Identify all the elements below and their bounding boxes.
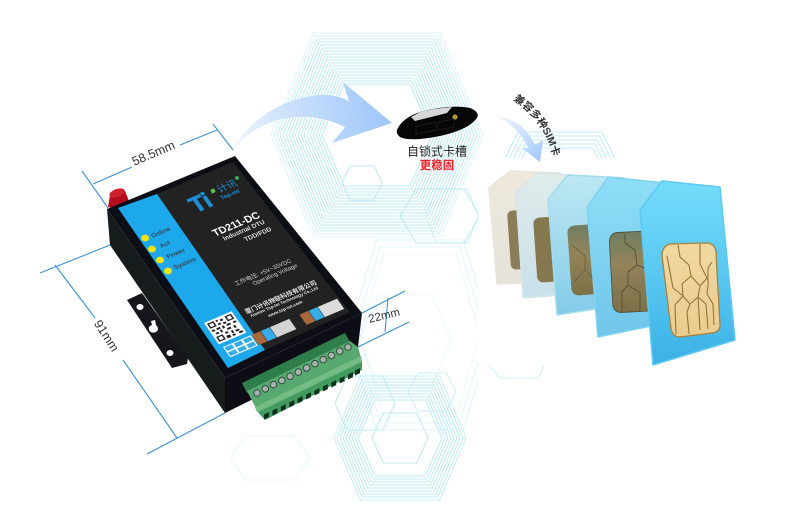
- SIM card 3: [548, 175, 640, 315]
- arrow: slot to SIM cards: [497, 117, 543, 162]
- logo: Ti: [184, 188, 217, 217]
- logo: 计讯: [214, 177, 240, 195]
- arrow: device to card slot: [229, 82, 392, 154]
- device: TD211-DC DTU: [107, 156, 362, 420]
- QR code: [204, 311, 246, 344]
- dimension: 91mm height: [40, 245, 225, 454]
- company text: 厦门计讯物联科技有限公司: [243, 278, 318, 316]
- white backdrop behind SIM cards: [478, 158, 800, 529]
- operating voltage text: Operating Voltage: [252, 263, 300, 287]
- dimension: 58.5mm width: [82, 124, 233, 208]
- SIM card 4: [587, 177, 680, 337]
- enclosure front side: [225, 313, 362, 413]
- LED labels: Act: [158, 240, 173, 250]
- company text: Xiamen Top-Iot Technology Co.,Ltd: [249, 285, 319, 318]
- caption: more secure: 更稳固: [420, 158, 454, 172]
- model text: Industrial DTU: [222, 219, 267, 242]
- LED labels: Power: [165, 247, 188, 260]
- gold chip: [662, 243, 720, 337]
- SIM card 1: [489, 171, 570, 284]
- background hexagon pattern: [230, 33, 800, 529]
- logo: [184, 176, 241, 217]
- enclosure left side: [107, 209, 225, 413]
- mounting flange: [127, 293, 188, 368]
- LED labels: System: [173, 256, 198, 271]
- enclosure top rim: [107, 156, 362, 378]
- black label panel: [157, 162, 350, 350]
- green terminal block: [242, 333, 362, 420]
- icon: locking SIM slot: [397, 107, 478, 139]
- SIM card 2: [516, 173, 600, 298]
- terminal sockets: [264, 368, 360, 420]
- terminal screws: [254, 344, 351, 396]
- company text: www.top-iot.com: [266, 300, 303, 318]
- status LEDs: [141, 235, 172, 274]
- antenna connector: [108, 187, 129, 209]
- interface label tiles: [223, 299, 344, 357]
- dimension: 22mm depth: [358, 291, 409, 347]
- SIM card stack: [489, 171, 735, 365]
- SIM card 5 front: [640, 181, 735, 365]
- blue label strip: [118, 194, 265, 368]
- model text: TDD/FDD: [243, 226, 274, 243]
- dimension: 22mm depth: 22mm: [367, 306, 401, 326]
- model text: TD211-DC: [211, 211, 263, 239]
- dimension: 58.5mm width: 58.5mm: [130, 138, 177, 169]
- dimension: 91mm height: 91mm: [91, 317, 122, 354]
- logo: Top-iot: [220, 189, 241, 202]
- LED labels: Online: [150, 226, 173, 240]
- LED labels: [150, 226, 198, 271]
- curved caption: compatible with multiple SIM cards: 兼容多种SIM卡: [514, 94, 560, 156]
- operating voltage text: 工作电压: +5V~35VDC: [233, 257, 294, 288]
- caption: self-locking slot: 自锁式卡槽: [407, 144, 467, 158]
